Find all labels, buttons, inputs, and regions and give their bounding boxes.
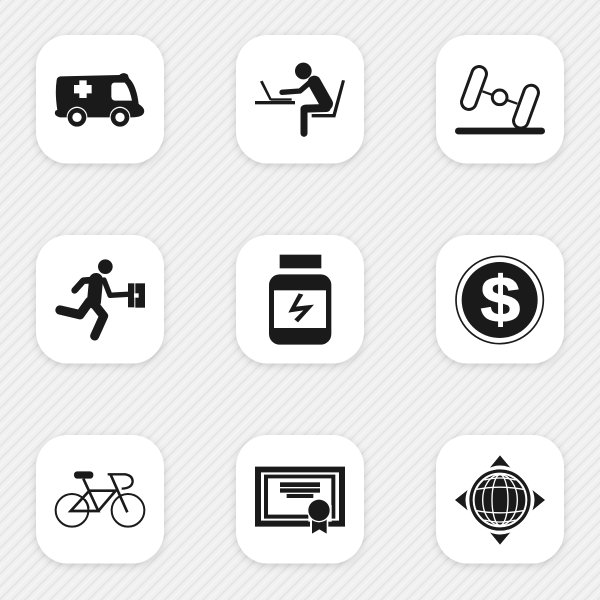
tile: ambulance xyxy=(36,35,164,164)
tile: dollar coin xyxy=(436,235,564,364)
tile: person at laptop xyxy=(236,35,364,164)
tile: globe with compass arrows xyxy=(436,435,564,564)
tile: certificate xyxy=(236,435,364,564)
dollar sign: $ xyxy=(480,264,520,336)
tile: axle and wheels xyxy=(436,35,564,164)
tile: racing bicycle xyxy=(36,435,164,564)
tile: supplement jar xyxy=(236,235,364,364)
tile: running man with briefcase xyxy=(36,235,164,364)
